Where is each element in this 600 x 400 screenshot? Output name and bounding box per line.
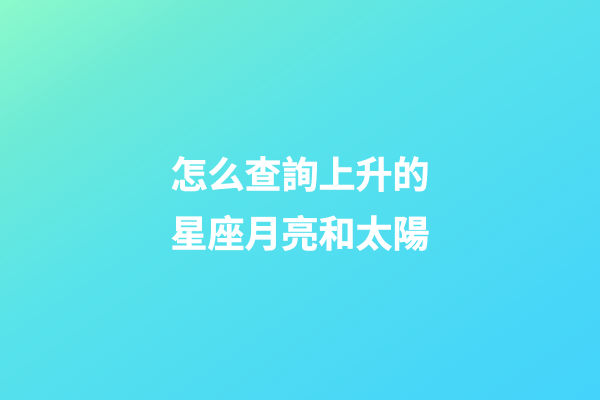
title line 2: 星座月亮和太陽 [170, 214, 430, 255]
title [170, 155, 430, 255]
title line 1: 怎么查詢上升的 [170, 155, 430, 196]
